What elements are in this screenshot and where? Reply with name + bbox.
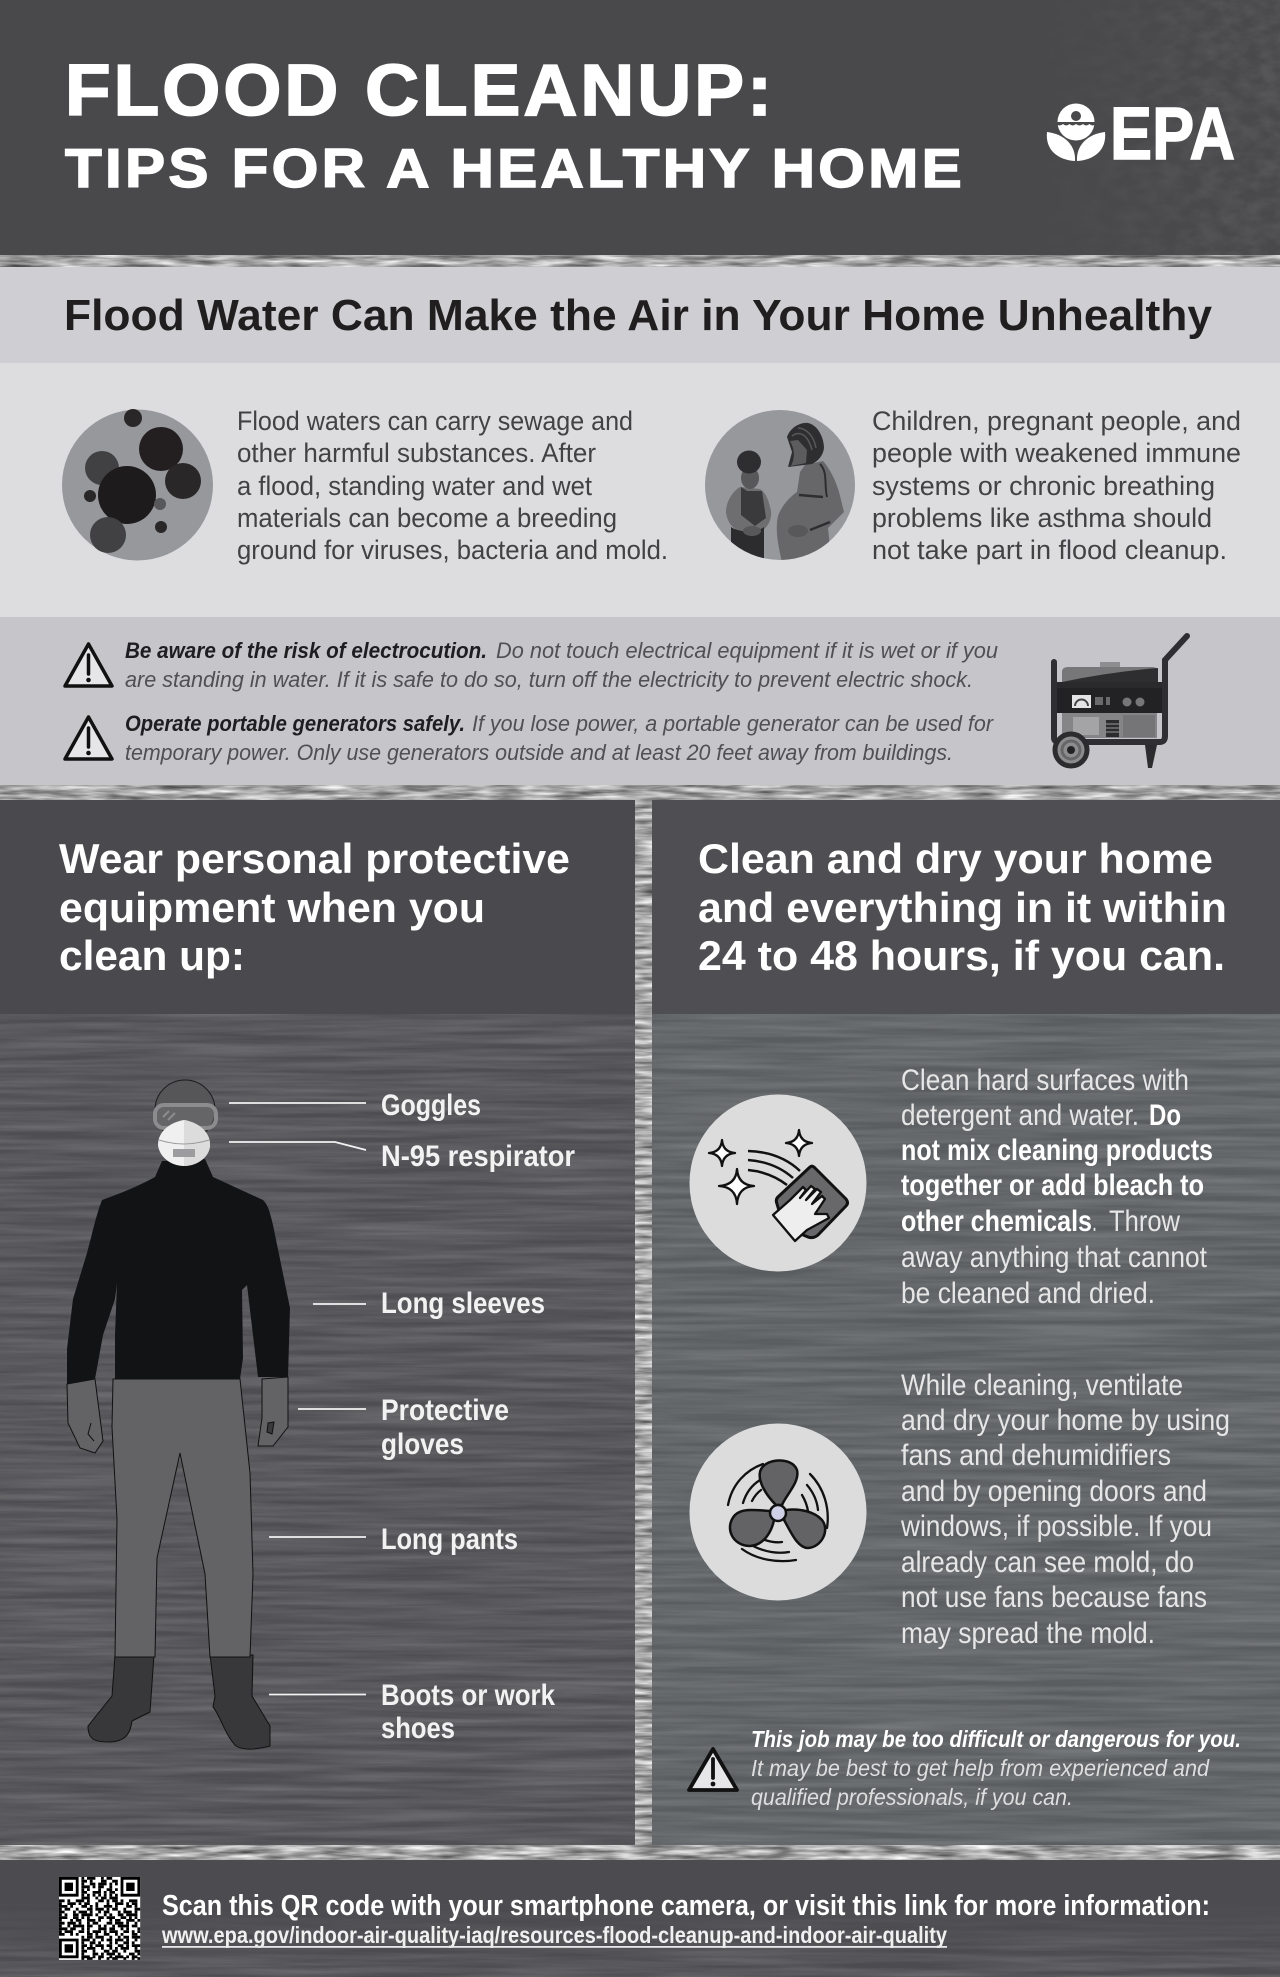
label: boots or work shoes: Boots or work bbox=[381, 1679, 555, 1712]
title: TIPS FOR A HEALTHY HOME bbox=[65, 137, 965, 199]
text: clean hard surfaces: other chemicals bbox=[901, 1205, 1092, 1238]
text: clean hard surfaces: be cleaned and dried. bbox=[901, 1277, 1155, 1310]
long sleeve sweater bbox=[67, 1159, 290, 1384]
heading: clean and dry within 24 to 48 hours: and everything in it within bbox=[698, 884, 1227, 931]
boots bbox=[88, 1655, 270, 1749]
text: who should not clean up: systems or chronic breathing bbox=[872, 471, 1215, 501]
text: clean hard surfaces: not mix cleaning products bbox=[901, 1134, 1213, 1167]
link: EPA web address: www.epa.gov/indoor-air-quality-iaq/resources-flood-cleanup-and-indoor-air-quality bbox=[161, 1922, 947, 1948]
callout: may be too difficult bbox=[751, 1726, 1241, 1810]
text: clean hard surfaces bbox=[901, 1064, 1213, 1310]
N-95 respirator bbox=[158, 1120, 210, 1166]
long pants bbox=[112, 1379, 253, 1657]
heading: clean and dry within 24 to 48 hours: Clean and dry your home bbox=[698, 835, 1213, 882]
callout: may be too difficult: qualified professionals, if you can. bbox=[751, 1784, 1073, 1810]
protective gloves bbox=[67, 1377, 288, 1453]
text: who should not clean up bbox=[872, 406, 1241, 565]
text: ventilate and dry: already can see mold, do bbox=[901, 1546, 1194, 1579]
head and hood bbox=[155, 1080, 215, 1140]
text: generator warning: Operate portable generators safely. bbox=[125, 711, 465, 736]
callout: may be too difficult: It may be best to get help from experienced and bbox=[751, 1755, 1210, 1781]
panel: footer bbox=[0, 1860, 1280, 1977]
text: ventilate and dry: and by opening doors and bbox=[901, 1475, 1207, 1508]
text: clean hard surfaces: detergent and water. bbox=[901, 1099, 1139, 1132]
heading: wear protective equipment: Wear personal protective bbox=[59, 835, 570, 882]
text: ventilate and dry: fans and dehumidifiers bbox=[901, 1439, 1171, 1472]
text: ventilate and dry: may spread the mold. bbox=[901, 1617, 1155, 1650]
text: who should not clean up: Children, pregnant people, and bbox=[872, 406, 1241, 436]
text: generator warning: If you lose power, a portable generator can be used for bbox=[472, 711, 995, 736]
panel: safety warnings bbox=[0, 617, 1280, 785]
text: generator warning bbox=[125, 711, 995, 765]
text: generator warning: temporary power. Only use generators outside and at least 20 feet away from buildings. bbox=[125, 740, 953, 765]
label: protective gloves bbox=[298, 1394, 509, 1461]
text: who should not clean up: problems like asthma should bbox=[872, 503, 1212, 533]
goggles bbox=[155, 1105, 216, 1128]
icon: fan bbox=[690, 1424, 866, 1600]
panel: clean and dry bbox=[652, 800, 1280, 1845]
icon: warning triangle generator bbox=[65, 717, 112, 759]
QR code bbox=[59, 1877, 140, 1960]
label: goggles: Goggles bbox=[381, 1089, 481, 1122]
illustration: person in protective gear bbox=[67, 1080, 290, 1749]
text: electrocution warning: Do not touch electrical equipment if it is wet or if you bbox=[496, 638, 998, 663]
text: ventilate and dry: and dry your home by using bbox=[901, 1404, 1230, 1437]
text: flood water hazards: ground for viruses, bacteria and mold. bbox=[237, 535, 668, 565]
text: ventilate and dry: windows, if possible. If you bbox=[900, 1510, 1212, 1543]
label: N-95 respirator bbox=[229, 1140, 575, 1173]
icon: portable generator bbox=[1053, 636, 1187, 768]
label: boots or work shoes: shoes bbox=[381, 1712, 455, 1745]
label: protective gloves: gloves bbox=[381, 1428, 464, 1461]
label: boots or work shoes bbox=[269, 1679, 555, 1745]
text: ventilate and dry: not use fans because fans bbox=[901, 1581, 1207, 1614]
icon: warning triangle electrocution bbox=[65, 644, 112, 686]
icon: cleaning cloth bbox=[690, 1094, 866, 1272]
heading: clean and dry within 24 to 48 hours bbox=[698, 835, 1227, 979]
icon: EPA logo: EPA bbox=[1110, 92, 1235, 175]
text: clean hard surfaces: . bbox=[1092, 1205, 1097, 1238]
text: flood water hazards bbox=[237, 406, 668, 565]
label: long sleeves: Long sleeves bbox=[381, 1287, 545, 1320]
text: flood water hazards: a flood, standing water and wet bbox=[237, 471, 592, 501]
icon: mold and bacteria bbox=[62, 409, 213, 560]
text: clean hard surfaces: away anything that cannot bbox=[901, 1241, 1208, 1274]
title: FLOOD CLEANUP: bbox=[65, 51, 775, 131]
text: clean hard surfaces: together or add bleach to bbox=[901, 1169, 1204, 1202]
title bbox=[65, 51, 965, 199]
text: ventilate and dry: While cleaning, ventilate bbox=[901, 1369, 1183, 1402]
text: clean hard surfaces: Do bbox=[1149, 1099, 1181, 1132]
heading: wear protective equipment: equipment when you bbox=[59, 884, 485, 931]
text: flood water hazards: materials can become a breeding bbox=[237, 503, 617, 533]
label: N-95 respirator: N-95 respirator bbox=[381, 1140, 575, 1173]
text: ventilate and dry bbox=[900, 1369, 1230, 1650]
panel: protective equipment bbox=[0, 800, 635, 1845]
heading: clean and dry within 24 to 48 hours: 24 to 48 hours, if you can. bbox=[698, 932, 1225, 979]
panel: header bbox=[0, 0, 1280, 255]
panel: flood water risks bbox=[0, 363, 1280, 617]
text: flood water hazards: Flood waters can carry sewage and bbox=[237, 406, 633, 436]
heading band: air quality bbox=[0, 267, 1280, 363]
label: protective gloves: Protective bbox=[381, 1394, 509, 1427]
label: long pants: Long pants bbox=[381, 1523, 518, 1556]
text: clean hard surfaces: Throw bbox=[1109, 1205, 1180, 1238]
icon: child and pregnant person bbox=[705, 410, 855, 562]
heading: wear protective equipment bbox=[59, 835, 570, 979]
text: who should not clean up: people with weakened immune bbox=[872, 438, 1241, 468]
text: electrocution warning: are standing in water. If it is safe to do so, turn off the electricity to prevent electric shock. bbox=[125, 667, 973, 692]
icon: EPA logo bbox=[1047, 92, 1235, 175]
heading band: air quality: Flood Water Can Make the Air in Your Home Unhealthy bbox=[64, 291, 1213, 340]
text: electrocution warning bbox=[125, 638, 998, 692]
icon: warning triangle professionals bbox=[689, 1749, 737, 1790]
text: clean hard surfaces: Clean hard surfaces with bbox=[901, 1064, 1189, 1097]
text: who should not clean up: not take part in flood cleanup. bbox=[872, 535, 1227, 565]
heading: wear protective equipment: clean up: bbox=[59, 932, 245, 979]
text: electrocution warning: Be aware of the risk of electrocution. bbox=[125, 638, 487, 663]
text: flood water hazards: other harmful substances. After bbox=[237, 438, 596, 468]
